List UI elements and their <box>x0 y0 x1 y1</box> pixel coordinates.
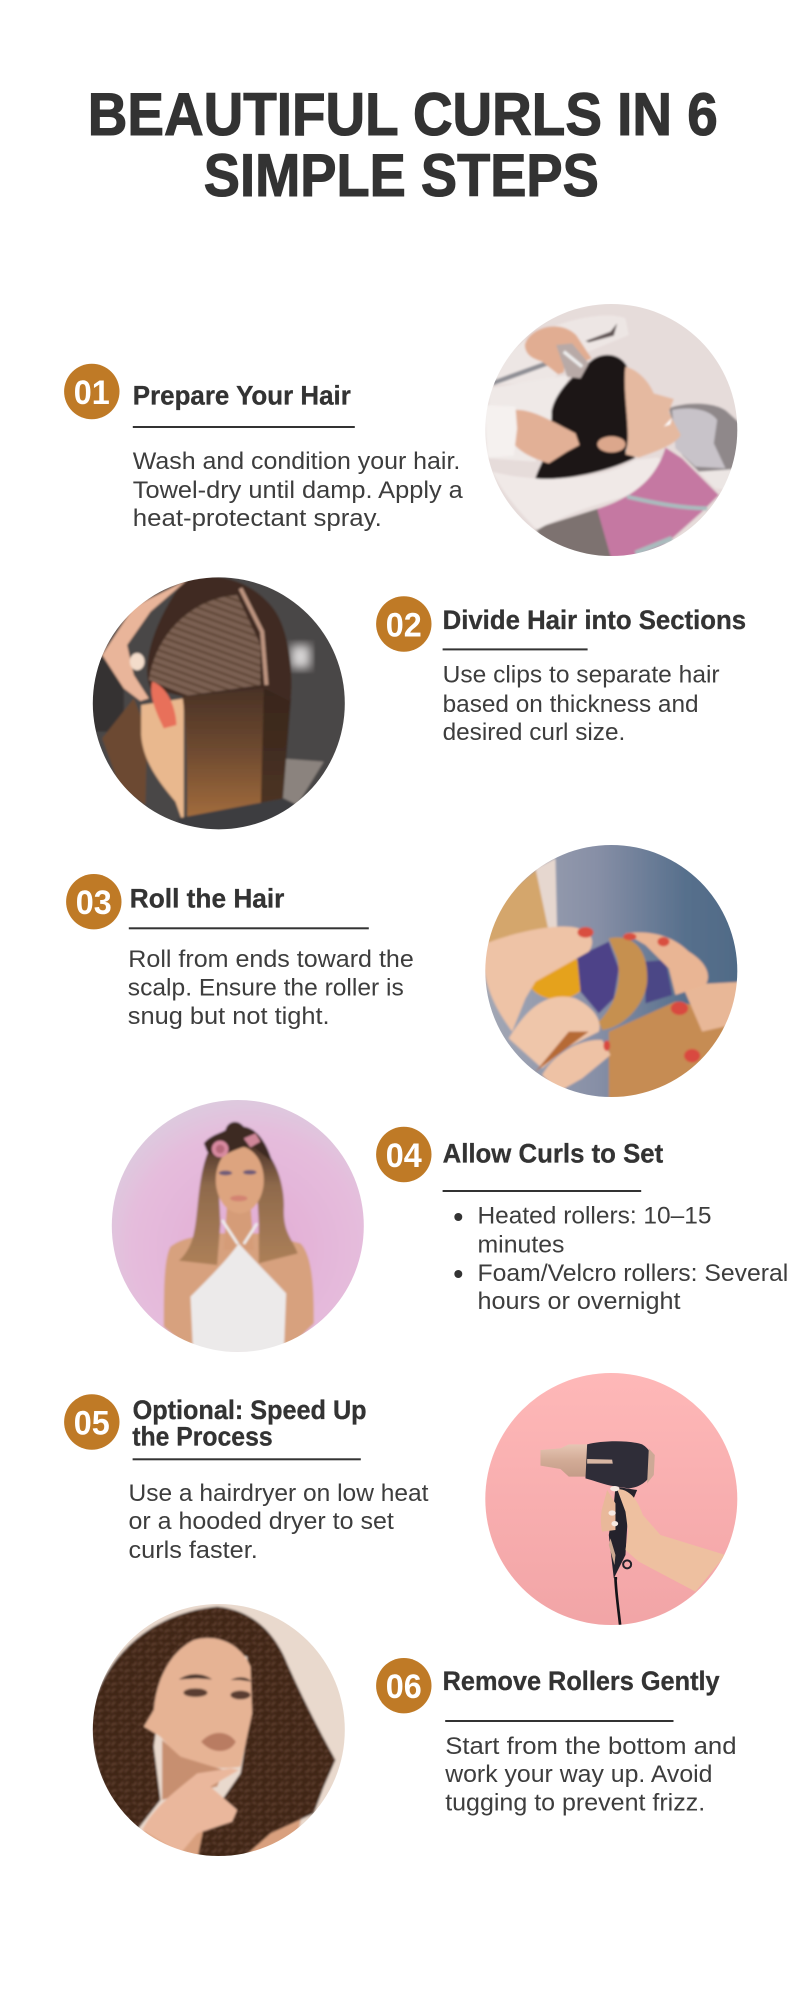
photo: fingers rolling hair on a roller <box>485 845 738 1097</box>
title <box>88 81 718 209</box>
body text step 6: tugging to prevent frizz. <box>445 1790 705 1817</box>
body text step 5 <box>128 1480 429 1564</box>
bullet list step 4: Heated rollers: 10–15 <box>478 1203 712 1230</box>
heading: optional speed up the process <box>132 1395 367 1452</box>
title: SIMPLE STEPS <box>204 142 599 209</box>
heading: prepare your hair: Prepare Your Hair <box>133 380 351 410</box>
body text step 6: work your way up. Avoid <box>444 1761 712 1788</box>
badge 03 <box>66 874 122 929</box>
photo: woman with finished curly hair <box>92 1604 345 1856</box>
body text step 3: scalp. Ensure the roller is <box>128 975 404 1002</box>
photo: woman with rollers in her hair <box>112 1100 364 1352</box>
bullet list step 4: hours or overnight <box>478 1288 681 1315</box>
badge 03: 03 <box>76 884 112 922</box>
heading: divide hair into sections: Divide Hair into Sections <box>443 605 746 635</box>
heading: optional speed up the process: the Process <box>132 1422 273 1452</box>
bullet list step 4: Foam/Velcro rollers: Several <box>478 1260 788 1287</box>
badge 02 <box>376 596 431 652</box>
panel: step 2 divide hair into sections <box>92 577 746 830</box>
panel: step 6 remove rollers gently <box>92 1604 735 1856</box>
badge 06 <box>376 1658 431 1713</box>
body text step 1 <box>133 448 463 532</box>
body text step 1: Towel-dry until damp. Apply a <box>133 477 463 504</box>
body text step 5: or a hooded dryer to set <box>128 1508 394 1535</box>
photo: hair being washed at a salon basin <box>485 304 738 556</box>
heading: allow curls to set: Allow Curls to Set <box>443 1138 663 1168</box>
panel: step 1 prepare your hair <box>64 304 738 556</box>
body text step 5: Use a hairdryer on low heat <box>128 1480 429 1507</box>
divider line <box>443 1190 641 1192</box>
divider line <box>133 426 355 428</box>
body text step 1: heat-protectant spray. <box>133 505 382 532</box>
photo: hand holding a hairdryer <box>485 1373 738 1625</box>
badge 05 <box>64 1394 120 1450</box>
divider line <box>133 1458 361 1460</box>
badge 05: 05 <box>74 1404 110 1442</box>
heading: roll the hair: Roll the Hair <box>130 883 285 913</box>
badge 01: 01 <box>74 374 110 412</box>
panel: step 3 roll the hair <box>66 845 738 1097</box>
body text step 6 <box>444 1733 736 1817</box>
badge 04: 04 <box>386 1137 422 1175</box>
panel: step 5 optional speed up the process <box>64 1373 738 1625</box>
divider line <box>129 927 369 929</box>
body text step 2: Use clips to separate hair <box>443 662 720 689</box>
body text step 3: Roll from ends toward the <box>128 946 414 973</box>
body text step 3 <box>128 946 414 1030</box>
body text step 2: based on thickness and <box>443 691 699 718</box>
body text step 3: snug but not tight. <box>128 1003 330 1030</box>
badge 01 <box>64 364 120 419</box>
body text step 1: Wash and condition your hair. <box>133 448 460 475</box>
divider line <box>445 1720 674 1722</box>
badge 04 <box>376 1127 431 1182</box>
panel: step 4 allow curls to set <box>112 1100 787 1352</box>
bullet list step 4 <box>454 1203 788 1315</box>
body text step 6: Start from the bottom and <box>445 1733 736 1760</box>
heading: optional speed up the process: Optional: Speed Up <box>133 1395 367 1425</box>
body text step 2: desired curl size. <box>443 719 625 746</box>
badge 06: 06 <box>386 1668 422 1706</box>
bullet list step 4: minutes <box>478 1232 565 1259</box>
heading: remove rollers gently: Remove Rollers Gently <box>443 1666 720 1696</box>
title: BEAUTIFUL CURLS IN 6 <box>88 81 718 148</box>
body text step 2 <box>443 662 720 746</box>
body text step 5: curls faster. <box>128 1537 258 1564</box>
badge 02: 02 <box>386 606 422 644</box>
divider line <box>443 648 588 650</box>
photo: hair divided into sections <box>92 577 345 830</box>
